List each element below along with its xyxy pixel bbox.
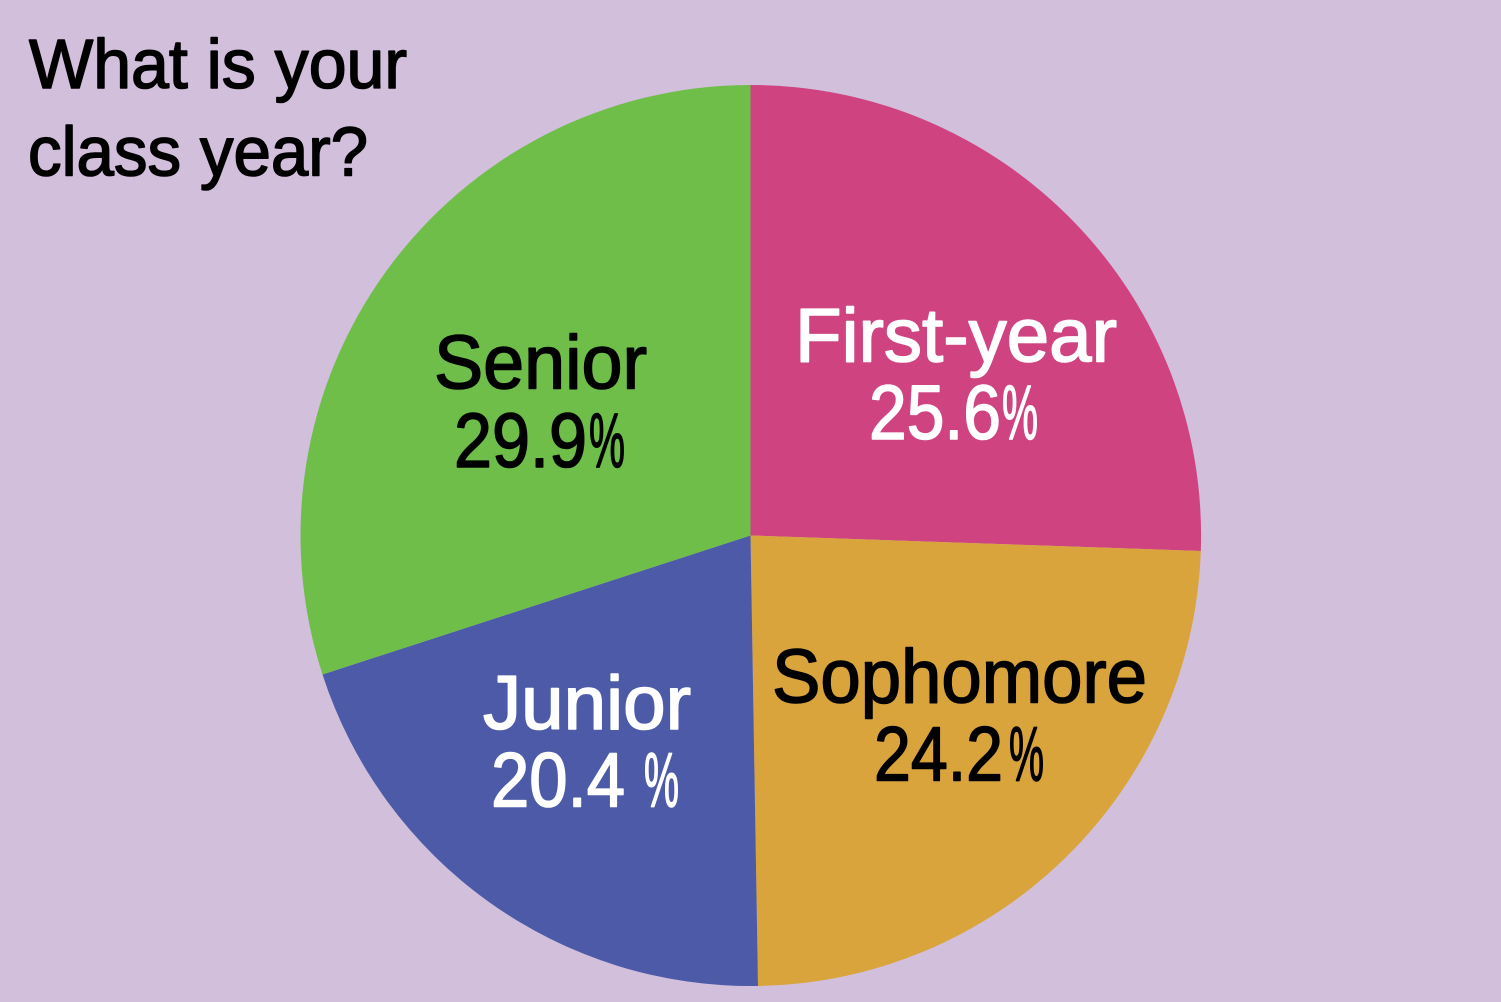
label: senior (434, 320, 647, 484)
label: sophomore: Sophomore (772, 634, 1147, 720)
slice: sophomore (750, 536, 1201, 986)
label: first-year: % (1002, 370, 1038, 456)
slice: senior (301, 85, 750, 674)
slice: junior (322, 536, 758, 986)
label: junior: % (644, 738, 679, 824)
label: junior: Junior (483, 661, 691, 746)
label: sophomore (772, 634, 1147, 798)
title (28, 25, 407, 190)
label: first-year: First-year (795, 294, 1117, 378)
label: first-year (795, 294, 1117, 456)
label: first-year: 25.6 (869, 370, 1001, 456)
label: junior (483, 661, 691, 824)
title: class year? (28, 112, 368, 190)
label: junior: 20.4 (491, 738, 625, 824)
label: sophomore: % (1009, 712, 1044, 798)
title: What is your (29, 25, 407, 103)
pie chart (301, 85, 1201, 986)
label: senior: % (589, 398, 625, 484)
label: senior: 29.9 (454, 398, 587, 484)
label: senior: Senior (434, 320, 647, 406)
label: sophomore: 24.2 (874, 712, 1003, 798)
slice: first-year (750, 85, 1201, 551)
